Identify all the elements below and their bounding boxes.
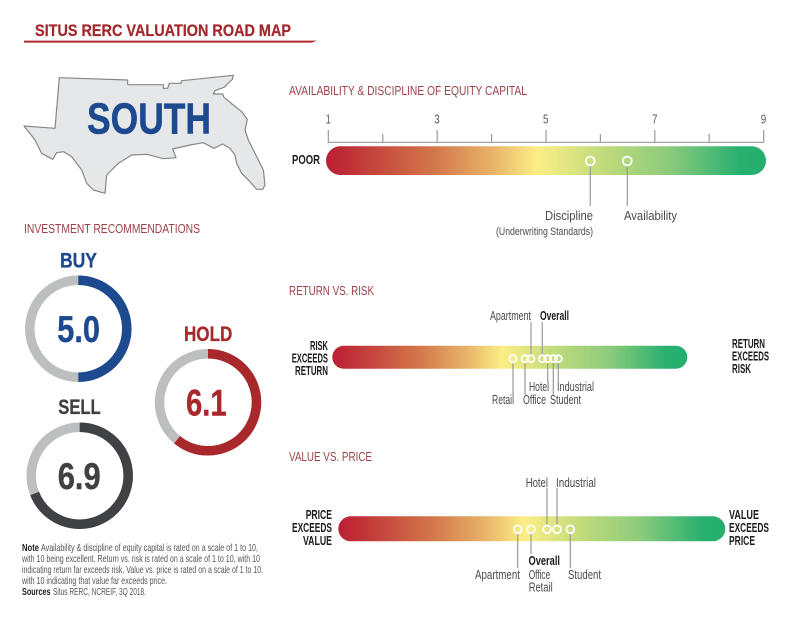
- label: value exceeds price: VALUE: [729, 508, 759, 522]
- donut: buy: [30, 250, 127, 377]
- heading: availability and discipline: AVAILABILITY & DISCIPLINE OF EQUITY CAPITAL: [289, 83, 527, 98]
- marker labels: value vs price: Apartment: [475, 568, 520, 582]
- marker labels: return vs risk: Office: [523, 393, 546, 407]
- gradient bar: availability and discipline: [326, 146, 766, 206]
- heading: return vs risk: RETURN VS. RISK: [289, 283, 374, 298]
- marker labels: return vs risk: [490, 309, 594, 407]
- marker labels: value vs price: Retail: [529, 580, 553, 594]
- note and sources: Note: [22, 542, 39, 554]
- note and sources: with 10 being excellent. Return vs. risk is rated on a scale of 1 to 10, with 10: [21, 553, 260, 565]
- note and sources: Availability & discipline of equity capital is rated on a scale of 1 to 10,: [41, 542, 258, 554]
- marker labels: value vs price: [475, 476, 601, 594]
- scale axis 1 to 9: [326, 112, 766, 142]
- note and sources: with 10 indicating that value far exceeds price.: [21, 575, 167, 587]
- scale axis 1 to 9: 7: [652, 112, 658, 126]
- donut: sell: 6.9: [58, 456, 101, 497]
- gradient bar: value vs price: [338, 488, 725, 568]
- marker label: discipline: [496, 208, 593, 238]
- note and sources: indicating return far exceeds risk. Value vs. price is rated on a scale of 1 to 10,: [22, 564, 263, 576]
- gradient bar: return vs risk: [332, 322, 687, 395]
- note and sources: [21, 542, 263, 598]
- marker labels: value vs price: Hotel: [526, 476, 548, 490]
- heading: investment recommendations: INVESTMENT RECOMMENDATIONS: [24, 221, 200, 236]
- marker label: availability: Availability: [624, 208, 677, 223]
- scale axis 1 to 9: 9: [761, 112, 766, 126]
- scale axis 1 to 9: 1: [326, 112, 331, 126]
- marker labels: value vs price: Student: [568, 568, 601, 582]
- label: risk exceeds return: EXCEEDS: [292, 352, 328, 366]
- donut: sell: SELL: [58, 396, 101, 419]
- label: return exceeds risk: RETURN: [732, 337, 765, 351]
- donut: buy: BUY: [60, 250, 97, 273]
- label: risk exceeds return: RISK: [310, 339, 328, 353]
- marker labels: return vs risk: Retail: [492, 393, 514, 407]
- label: risk exceeds return: [292, 339, 328, 378]
- label: price exceeds value: [292, 508, 332, 548]
- label: value exceeds price: PRICE: [729, 534, 755, 548]
- label: price exceeds value: EXCEEDS: [292, 521, 332, 535]
- label: price exceeds value: VALUE: [303, 534, 332, 548]
- marker labels: return vs risk: Overall: [540, 309, 569, 323]
- note and sources: Sources: [22, 586, 51, 598]
- map: south region: SOUTH: [87, 94, 211, 144]
- marker label: discipline: Discipline: [545, 208, 593, 223]
- label: return exceeds risk: [732, 337, 769, 376]
- map: south region: [24, 75, 265, 193]
- marker labels: return vs risk: Industrial: [557, 380, 594, 394]
- marker label: discipline: (Underwriting Standards): [496, 226, 593, 238]
- note and sources: Situs RERC, NCREIF, 3Q 2018.: [53, 586, 146, 598]
- marker labels: value vs price: Overall: [528, 554, 560, 568]
- donut: hold: 6.1: [186, 383, 227, 424]
- scale axis 1 to 9: 5: [543, 112, 549, 126]
- label: return exceeds risk: EXCEEDS: [732, 350, 769, 364]
- title: SITUS RERC VALUATION ROAD MAP: [35, 21, 291, 40]
- label: poor: POOR: [292, 153, 320, 167]
- label: price exceeds value: PRICE: [306, 508, 332, 522]
- marker labels: return vs risk: Student: [550, 393, 581, 407]
- marker labels: value vs price: Office: [529, 568, 550, 582]
- label: value exceeds price: EXCEEDS: [729, 521, 769, 535]
- label: return exceeds risk: RISK: [732, 362, 751, 376]
- label: risk exceeds return: RETURN: [295, 364, 328, 378]
- marker labels: value vs price: Industrial: [556, 476, 596, 490]
- marker labels: return vs risk: Apartment: [490, 309, 531, 323]
- donut: hold: [160, 323, 256, 451]
- heading: value vs price: VALUE VS. PRICE: [289, 449, 372, 464]
- label: value exceeds price: [729, 508, 769, 548]
- donut: sell: [31, 396, 128, 524]
- donut: hold: HOLD: [184, 323, 232, 346]
- marker labels: return vs risk: Hotel: [529, 380, 549, 394]
- scale axis 1 to 9: 3: [434, 112, 440, 126]
- donut: buy: 5.0: [57, 309, 100, 350]
